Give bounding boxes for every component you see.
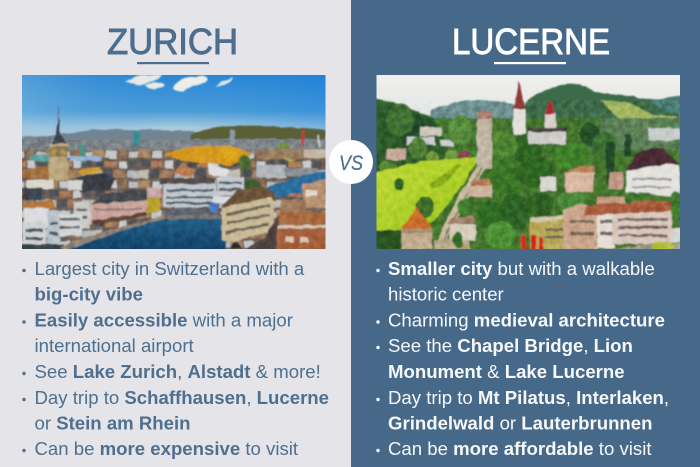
- bullet list: Lucerne: Day trip to Mt Pilatus, Interlaken,: [388, 387, 669, 408]
- bullet list: Lucerne: [376, 258, 669, 459]
- heading: Lucerne: LUCERNE: [452, 21, 610, 62]
- bullet list: Lucerne: Smaller city but with a walkable: [388, 258, 655, 279]
- panel: Lucerne: [351, 0, 700, 467]
- bullet list: Zurich: big-city vibe: [34, 284, 143, 305]
- panel: Zurich: [22, 28, 328, 459]
- photo: Zurich old town and river: [18, 73, 330, 253]
- bullet list: Zurich: Day trip to Schaffhausen, Lucerne: [34, 387, 329, 408]
- heading: Zurich: ZURICH: [107, 21, 238, 62]
- photo: Lucerne hillside and Musegg wall: [372, 73, 684, 253]
- bullet list: Lucerne: historic center: [388, 284, 504, 305]
- badge: VS: [329, 140, 373, 184]
- bullet list: Lucerne: Monument & Lake Lucerne: [388, 361, 625, 382]
- bullet list: Zurich: or Stein am Rhein: [34, 412, 191, 434]
- badge: VS: VS: [339, 152, 363, 175]
- bullet list: Zurich: Easily accessible with a major: [34, 310, 293, 330]
- bullet list: Zurich: Can be more expensive to visit: [34, 438, 299, 459]
- bullet list: Lucerne: Charming medieval architecture: [388, 310, 665, 330]
- bullet list: Zurich: [22, 258, 329, 459]
- bullet list: Lucerne: Grindelwald or Lauterbrunnen: [388, 412, 652, 434]
- bullet list: Zurich: Largest city in Switzerland with a: [34, 258, 305, 279]
- bullet list: Lucerne: See the Chapel Bridge, Lion: [388, 335, 633, 356]
- bullet list: Lucerne: Can be more affordable to visit: [388, 438, 652, 459]
- bullet list: Zurich: international airport: [34, 335, 195, 356]
- bullet list: Zurich: See Lake Zurich, Alstadt & more!: [34, 361, 321, 382]
